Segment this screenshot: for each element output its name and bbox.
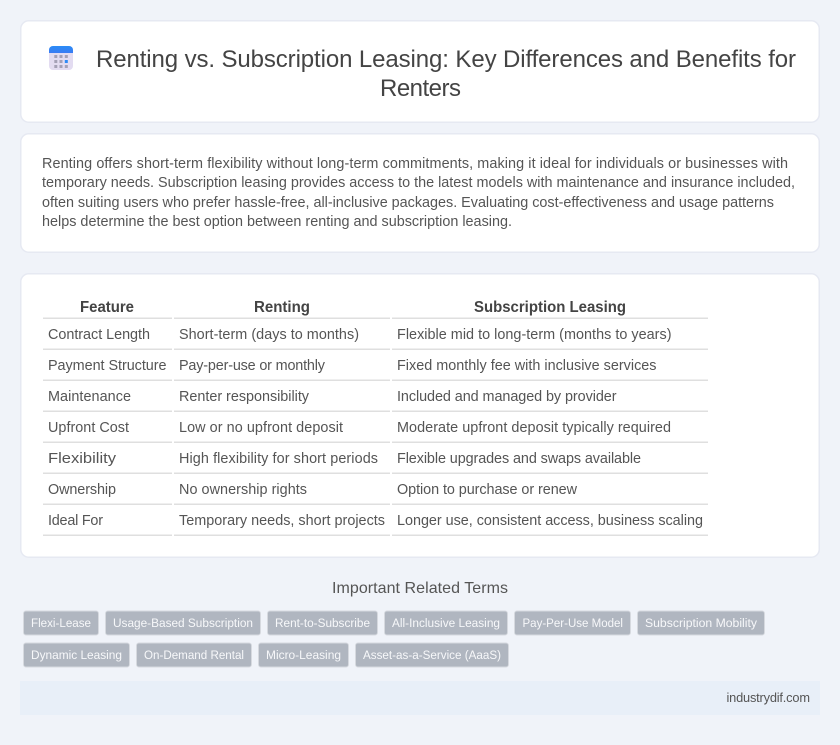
intro text: often suiting users who prefer hassle-free, all-inclusive packages. Evaluating cost-effectiveness and usage patterns xyxy=(42,195,774,211)
row: flexibility: Flexibility xyxy=(48,451,117,467)
intro text: Renting offers short-term flexibility without long-term commitments, making it ideal for individuals or businesses with xyxy=(42,156,788,172)
tag xyxy=(356,643,508,667)
row: ownership xyxy=(48,482,578,498)
row: payment structure: Payment Structure xyxy=(48,358,166,374)
tag xyxy=(268,611,378,635)
tag: Asset-as-a-Service (AaaS) xyxy=(363,648,501,662)
panel: comparison table xyxy=(21,274,819,557)
row: upfront cost: Upfront Cost xyxy=(48,420,129,436)
row: payment structure: Fixed monthly fee with inclusive services xyxy=(397,358,656,374)
tag xyxy=(24,611,98,635)
tag: Pay-Per-Use Model xyxy=(522,616,623,630)
related term tags xyxy=(24,611,764,667)
row: ownership: Option to purchase or renew xyxy=(397,482,578,498)
row: payment structure xyxy=(48,358,656,374)
tag: Subscription Mobility xyxy=(645,616,758,630)
tag xyxy=(136,643,252,667)
panel: title header xyxy=(21,21,819,122)
intro text xyxy=(42,156,795,230)
tag: Dynamic Leasing xyxy=(31,648,122,662)
table header row: Subscription Leasing xyxy=(474,299,626,316)
row: flexibility: Flexible upgrades and swaps available xyxy=(397,451,641,467)
row: maintenance: Maintenance xyxy=(48,389,131,405)
tag: On-Demand Rental xyxy=(144,648,244,662)
table header row xyxy=(80,299,626,316)
row: contract length: Short-term (days to months) xyxy=(179,327,359,343)
table header row: Feature xyxy=(80,299,134,316)
panel: intro paragraph xyxy=(21,134,819,252)
row: upfront cost: Low or no upfront deposit xyxy=(179,420,343,436)
tag xyxy=(106,611,260,635)
tag: Flexi-Lease xyxy=(31,616,91,630)
tag: All-Inclusive Leasing xyxy=(392,616,500,630)
tag: Usage-Based Subscription xyxy=(113,616,253,630)
row: upfront cost: Moderate upfront deposit typically required xyxy=(397,420,671,436)
row: contract length: Flexible mid to long-term (months to years) xyxy=(397,327,672,343)
row: ideal for: Longer use, consistent access, business scaling xyxy=(397,513,703,529)
tag xyxy=(514,611,630,635)
row: ideal for: Temporary needs, short projects xyxy=(179,513,385,529)
title: Renters xyxy=(380,75,461,102)
intro text: temporary needs. Subscription leasing provides access to the latest models with maintenance and insurance included, xyxy=(42,175,795,191)
row: ownership: Ownership xyxy=(48,482,116,498)
table header row: Renting xyxy=(254,299,310,316)
icon: calendar xyxy=(49,46,73,70)
tag: Micro-Leasing xyxy=(266,648,341,662)
row: ideal for xyxy=(48,513,703,529)
title xyxy=(96,46,796,102)
heading: important related terms: Important Related Terms xyxy=(332,580,508,597)
row: maintenance xyxy=(48,389,617,405)
row: maintenance: Renter responsibility xyxy=(179,389,310,405)
tag xyxy=(24,643,130,667)
row: flexibility xyxy=(48,451,641,467)
row: contract length: Contract Length xyxy=(48,327,150,343)
title: Renting vs. Subscription Leasing: Key Differences and Benefits for xyxy=(96,46,796,73)
intro text: helps determine the best option between renting and subscription leasing. xyxy=(42,214,512,230)
row: ideal for: Ideal For xyxy=(48,513,103,529)
row: flexibility: High flexibility for short periods xyxy=(179,451,378,467)
tag xyxy=(258,643,348,667)
row: upfront cost xyxy=(48,420,671,436)
tag xyxy=(384,611,508,635)
tag: Rent-to-Subscribe xyxy=(275,616,370,630)
footer band xyxy=(20,681,820,715)
row: payment structure: Pay-per-use or monthly xyxy=(179,358,326,374)
row: contract length xyxy=(48,327,672,343)
row: maintenance: Included and managed by provider xyxy=(397,389,617,405)
footer source text: industrydif.com xyxy=(726,690,810,705)
row: ownership: No ownership rights xyxy=(179,482,307,498)
tag xyxy=(638,611,764,635)
